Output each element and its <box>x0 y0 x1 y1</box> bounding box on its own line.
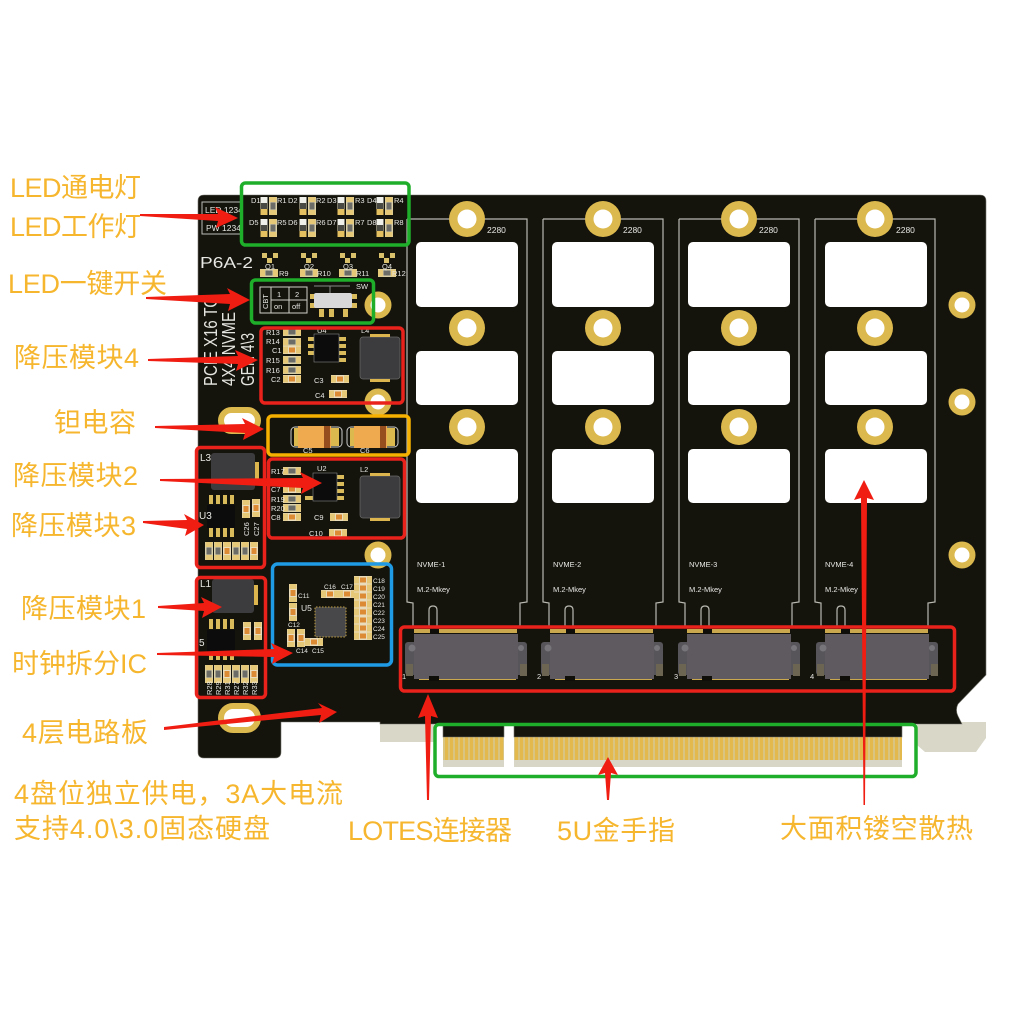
board name: P6A-2 <box>200 255 253 272</box>
buck module 4 components: C4 <box>315 391 325 400</box>
LOTES M.2 connectors: 4 <box>810 672 814 681</box>
arrow: cooling <box>854 480 874 805</box>
buck module 4 components: R14 <box>266 337 280 346</box>
LED components: R3 <box>355 196 365 205</box>
LED silk legend: LED 1234 <box>205 205 243 215</box>
slot labels: NVME-2 <box>553 560 581 569</box>
LOTES M.2 connectors: 2 <box>537 672 541 681</box>
vertical board title: PCIE X16 TO <box>201 296 221 386</box>
buck module 2 components: R17 <box>271 467 285 476</box>
clock splitter IC components: C23 <box>373 618 385 625</box>
slot labels: M.2-Mkey <box>689 585 722 594</box>
slot labels <box>417 225 915 594</box>
switch table: CBT <box>261 294 270 309</box>
slot labels: M.2-Mkey <box>553 585 586 594</box>
tantalum capacitors: C5 <box>303 446 313 455</box>
buck module 2 components: L2 <box>360 465 368 474</box>
LED components: D4 <box>367 196 377 205</box>
label: clock splitter IC: 时钟拆分IC <box>12 649 147 679</box>
buck module 3 components: L3 <box>200 453 212 464</box>
buck module 3 components <box>199 453 261 560</box>
tantalum frame <box>268 416 409 455</box>
arrow: LED lights <box>140 207 238 228</box>
slot labels: NVME-3 <box>689 560 717 569</box>
LED components: R2 <box>316 196 326 205</box>
arrow: tantalum capacitor <box>155 418 264 440</box>
LED components: D8 <box>367 218 377 227</box>
arrow: buck 4 <box>148 350 258 371</box>
hollowed cooling windows <box>416 242 927 503</box>
arrow: gold fingers <box>598 757 618 800</box>
slot labels: 2280 <box>896 225 915 235</box>
buck module 1 components: R28 <box>205 681 214 695</box>
LED components: D1 <box>251 196 261 205</box>
buck module 1 components: R31 <box>223 681 232 695</box>
clock splitter IC components: C19 <box>373 586 385 593</box>
clock splitter IC components <box>287 576 385 655</box>
arrow: LED switch <box>146 288 250 311</box>
switch frame <box>252 280 374 323</box>
buck module 1 components: 5 <box>199 638 205 649</box>
buck module 1 components: R27 <box>232 681 241 695</box>
slot labels: M.2-Mkey <box>417 585 450 594</box>
transistors and resistors row <box>260 253 406 278</box>
LED components: D3 <box>327 196 337 205</box>
arrow: buck 1 <box>158 597 222 618</box>
buck module 4 components: U4 <box>317 326 327 335</box>
buck module 3 components: C27 <box>252 522 261 536</box>
buck module 1 components: L1 <box>200 579 212 590</box>
LOTES M.2 connectors: 3 <box>674 672 678 681</box>
clock splitter IC components: C16 <box>324 584 336 591</box>
annotation labels <box>8 173 973 846</box>
label: buck module 3: 降压模块3 <box>11 511 136 541</box>
LED components: R7 <box>355 218 365 227</box>
label: LOTES connector: LOTES连接器 <box>348 816 512 846</box>
LED components: D7 <box>327 218 337 227</box>
clock splitter IC components: C21 <box>373 602 385 609</box>
slide switch: SW <box>356 282 369 291</box>
LED components: D2 <box>288 196 298 205</box>
clock splitter IC components: C22 <box>373 610 385 617</box>
cream board tab, right <box>917 722 986 752</box>
transistors and resistors row: Q4 <box>382 262 392 271</box>
clock splitter IC components: C17 <box>341 584 353 591</box>
slot labels: 2280 <box>759 225 778 235</box>
buck module 2 components: C7 <box>271 485 281 494</box>
buck module 4 components: C1 <box>272 346 282 355</box>
LED silk legend <box>202 202 243 234</box>
buck module 4 components: R16 <box>266 366 280 375</box>
buck module 4 components: C2 <box>271 375 281 384</box>
buck module 4 components: C3 <box>314 376 324 385</box>
LED components: R6 <box>316 218 326 227</box>
LED components: R5 <box>277 218 287 227</box>
switch table: off <box>292 302 301 311</box>
transistors and resistors row: Q3 <box>343 262 353 271</box>
clock splitter IC components: U5 <box>301 603 312 613</box>
highlight frames <box>196 183 954 776</box>
LED frame <box>242 183 409 245</box>
buck module 3 components: U3 <box>199 511 212 522</box>
buck module 1 components: R29 <box>214 681 223 695</box>
LOTES M.2 connectors <box>402 629 938 681</box>
clock splitter IC components: C15 <box>312 648 324 655</box>
label: tantalum capacitor: 钽电容 <box>54 408 136 438</box>
arrow: 4-layer PCB <box>164 703 337 730</box>
buck module 4 components <box>266 326 400 400</box>
gold finger connector <box>443 737 902 767</box>
clock splitter IC components: C20 <box>373 594 385 601</box>
arrow: clock IC <box>157 643 293 664</box>
arrow: buck 3 <box>143 514 204 536</box>
slot labels: NVME-4 <box>825 560 853 569</box>
switch table <box>260 287 307 313</box>
LED components <box>249 196 404 237</box>
tantalum capacitors: C6 <box>360 446 370 455</box>
LOTES M.2 connectors: 1 <box>402 672 406 681</box>
label: gold fingers: 5U金手指 <box>557 816 675 846</box>
label: power note line 1: 4盘位独立供电，3A大电流 <box>14 779 343 809</box>
label: hollow cooling: 大面积镂空散热 <box>780 814 973 844</box>
buck module 1 components: R33 <box>250 681 259 695</box>
buck module 1 components: R32 <box>241 681 250 695</box>
tantalum capacitors <box>291 426 398 455</box>
vertical board title: GEN 4\3 <box>238 333 258 386</box>
label: LED power light: LED通电灯 <box>10 173 141 203</box>
LED silk legend: PW 1234 <box>206 223 241 233</box>
vertical board title: 4X4 NVME <box>219 312 239 386</box>
gold finger frame <box>435 724 916 776</box>
transistors and resistors row: R11 <box>356 269 369 278</box>
clock splitter IC components: C24 <box>373 626 385 633</box>
buck 2 frame <box>268 459 404 538</box>
arrow: LOTES connector <box>418 694 438 800</box>
slot labels: 2280 <box>487 225 506 235</box>
buck 3 frame <box>196 448 264 568</box>
arrows <box>140 207 874 805</box>
buck module 1 components <box>199 579 262 695</box>
buck module 2 components <box>271 464 400 538</box>
clock splitter IC components: C18 <box>373 578 385 585</box>
label: LED activity light: LED工作灯 <box>10 212 141 242</box>
clock splitter IC components: C14 <box>296 648 308 655</box>
connector frame <box>400 627 954 691</box>
label: 4-layer PCB: 4层电路板 <box>22 718 148 748</box>
mounting holes <box>221 201 976 730</box>
buck module 2 components: C9 <box>314 513 324 522</box>
buck module 2 components: C8 <box>271 513 281 522</box>
transistors and resistors row: Q1 <box>265 262 275 271</box>
buck module 4 components: L4 <box>361 326 369 335</box>
buck module 4 components: R13 <box>266 328 280 337</box>
buck module 2 components: R19 <box>271 495 285 504</box>
clock IC frame <box>272 564 392 665</box>
transistors and resistors row: Q2 <box>304 262 314 271</box>
LED components: R4 <box>394 196 404 205</box>
slot labels: M.2-Mkey <box>825 585 858 594</box>
LED components: D6 <box>288 218 298 227</box>
buck module 2 components: R20 <box>271 504 285 513</box>
slot outlines <box>407 219 935 626</box>
transistors and resistors row: R9 <box>279 269 289 278</box>
buck module 2 components: C10 <box>309 529 323 538</box>
arrow: buck 2 <box>160 472 322 494</box>
clock splitter IC components: C25 <box>373 634 385 641</box>
transistors and resistors row: R12 <box>392 269 406 278</box>
switch table: on <box>274 302 282 311</box>
transistors and resistors row: R10 <box>317 269 331 278</box>
label: power note line 2: 支持4.0\3.0固态硬盘 <box>14 814 270 844</box>
label: LED switch: LED一键开关 <box>8 269 167 299</box>
LED components: D5 <box>249 218 259 227</box>
slot labels: NVME-1 <box>417 560 445 569</box>
buck module 4 components: R15 <box>266 356 280 365</box>
buck 4 frame <box>261 328 403 403</box>
clock splitter IC components: C11 <box>298 593 310 600</box>
buck module 2 components: U2 <box>317 464 327 473</box>
cream board tab, left <box>380 722 434 742</box>
vertical board title <box>201 296 258 386</box>
buck 1 frame <box>196 578 266 698</box>
label: buck module 4: 降压模块4 <box>14 343 139 373</box>
label: buck module 1: 降压模块1 <box>21 594 146 624</box>
clock splitter IC components: C12 <box>288 622 300 629</box>
switch table: 1 <box>277 290 281 299</box>
PCB board <box>198 195 986 758</box>
buck module 3 components: C26 <box>242 522 251 536</box>
LED components: R1 <box>277 196 287 205</box>
switch table: 2 <box>295 290 299 299</box>
LED components: R8 <box>394 218 404 227</box>
label: buck module 2: 降压模块2 <box>13 461 138 491</box>
slide switch <box>310 282 369 317</box>
slot labels: 2280 <box>623 225 642 235</box>
